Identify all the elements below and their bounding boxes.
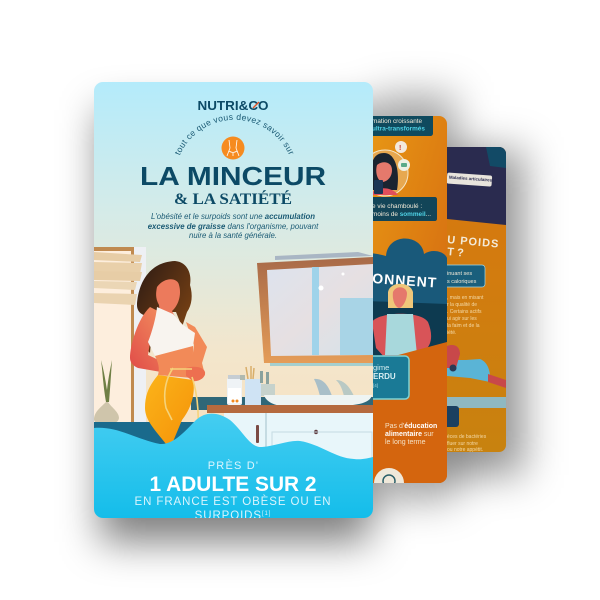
stat text: [134, 459, 332, 522]
bacteria copy: èces de bactéries: [447, 434, 487, 440]
france line: EN FRANCE EST OBÈSE OU EN: [134, 495, 332, 508]
intro text: nuire à la santé générale.: [189, 231, 277, 240]
backsplash: [191, 397, 373, 410]
waist: [155, 346, 193, 378]
body copy: la faim et de la: [447, 323, 480, 329]
back card: sleep and weight: [447, 147, 506, 452]
vanity cabinet: [224, 413, 373, 473]
illustration: blond woman: [372, 284, 431, 358]
measuring tape: [165, 368, 198, 432]
regime perdu panel: [4]: [373, 383, 378, 388]
soft drop shadows: [100, 95, 524, 542]
surpoids line: [1]: [262, 511, 271, 517]
bacteria copy: fluer sur notre: [447, 441, 478, 447]
illustration: stressed woman: [373, 141, 410, 196]
label: maladies articulaires: [447, 172, 493, 187]
illustration: plant: [94, 360, 119, 423]
teal band: [447, 397, 506, 408]
woman: [130, 261, 207, 444]
regime perdu panel: [373, 355, 410, 400]
icon: round badge: [374, 468, 404, 483]
label: maladies articulaires: Maladies articulaires: [449, 175, 493, 183]
front card: [94, 82, 373, 518]
middle card: causes: [373, 116, 447, 483]
subtitle: & LA SATIÉTÉ: [174, 189, 292, 208]
calorie callout: [447, 264, 486, 288]
cloud with heading: [373, 238, 447, 356]
icon: orange body: [222, 136, 244, 160]
heading: du poids: T ?: [447, 246, 464, 259]
calorie callout: inuant ses: [447, 271, 472, 277]
calorie callout: s caloriques: [447, 279, 477, 285]
illustration: window and blinds: [94, 247, 146, 422]
pres d': PRÈS D': [208, 459, 259, 472]
intro text: [148, 212, 319, 240]
teal corner shape: [486, 147, 506, 168]
dark header panel: [447, 147, 506, 225]
callout: sommeil: moins de sommeil...: [372, 211, 431, 218]
callout: ultra-transformes: mation croissante: [372, 118, 423, 125]
bacteria copy: [447, 434, 487, 453]
regime perdu panel: gime: [373, 363, 389, 372]
sink: [264, 379, 372, 406]
big stat: 1 ADULTE SUR 2: [150, 473, 316, 496]
body copy: . Certains actifs: [447, 309, 482, 315]
bacteria copy: ou notre appétit.: [447, 447, 483, 453]
title: LA MINCEUR: [140, 161, 326, 191]
surpoids line: SURPOIDS: [195, 510, 262, 522]
intro text: excessive de graisse dans l'organisme, pouvant: [148, 222, 319, 231]
logo: [198, 101, 268, 110]
cloud with heading: ONNENT: [372, 270, 438, 291]
body copy: ui agir sur les: [447, 316, 477, 322]
small dark label: [447, 406, 459, 427]
logo: NUTRI&CO: [198, 98, 268, 113]
face and neck: [156, 279, 180, 320]
vanity top: [207, 405, 373, 413]
body copy: iété.: [447, 330, 456, 336]
body copy: r la qualité de: [447, 302, 477, 308]
mirror: [257, 252, 373, 366]
text: education: le long terme: [385, 439, 426, 446]
regime perdu panel: ERDU: [373, 372, 396, 381]
wave back: [94, 414, 373, 518]
callout: sommeil: e vie chamboulé :: [372, 203, 422, 210]
body copy: , mais en misant: [447, 295, 484, 301]
heading: du poids: [448, 236, 498, 256]
heading: du poids: U POIDS: [447, 234, 500, 251]
orange lower sweep: [373, 342, 447, 483]
callout: sommeil: [373, 197, 437, 221]
products on counter: [227, 366, 275, 405]
text: education: [385, 423, 437, 446]
intro text: L'obésité et le surpoids sont une accumulation: [151, 212, 315, 221]
text: education: alimentaire sur: [385, 431, 434, 438]
legs and pants: [145, 375, 194, 444]
hand: [186, 367, 205, 381]
illustration: woman exercising: [447, 345, 506, 388]
illustration: stressed woman: !: [399, 145, 401, 152]
text: education: Pas d'éducation: [385, 423, 437, 430]
floor tiles wall: [94, 422, 194, 444]
hair: [137, 261, 192, 353]
body copy: [447, 295, 484, 336]
left arm and shoulders: [130, 307, 159, 372]
curved tagline: tout ce que vous devez savoir sur: [175, 114, 294, 155]
top: [148, 307, 195, 356]
callout: ultra-transformes: ultra-transformés: [372, 126, 425, 132]
right arm: [186, 322, 207, 382]
callout: ultra-transformes: [373, 116, 433, 136]
